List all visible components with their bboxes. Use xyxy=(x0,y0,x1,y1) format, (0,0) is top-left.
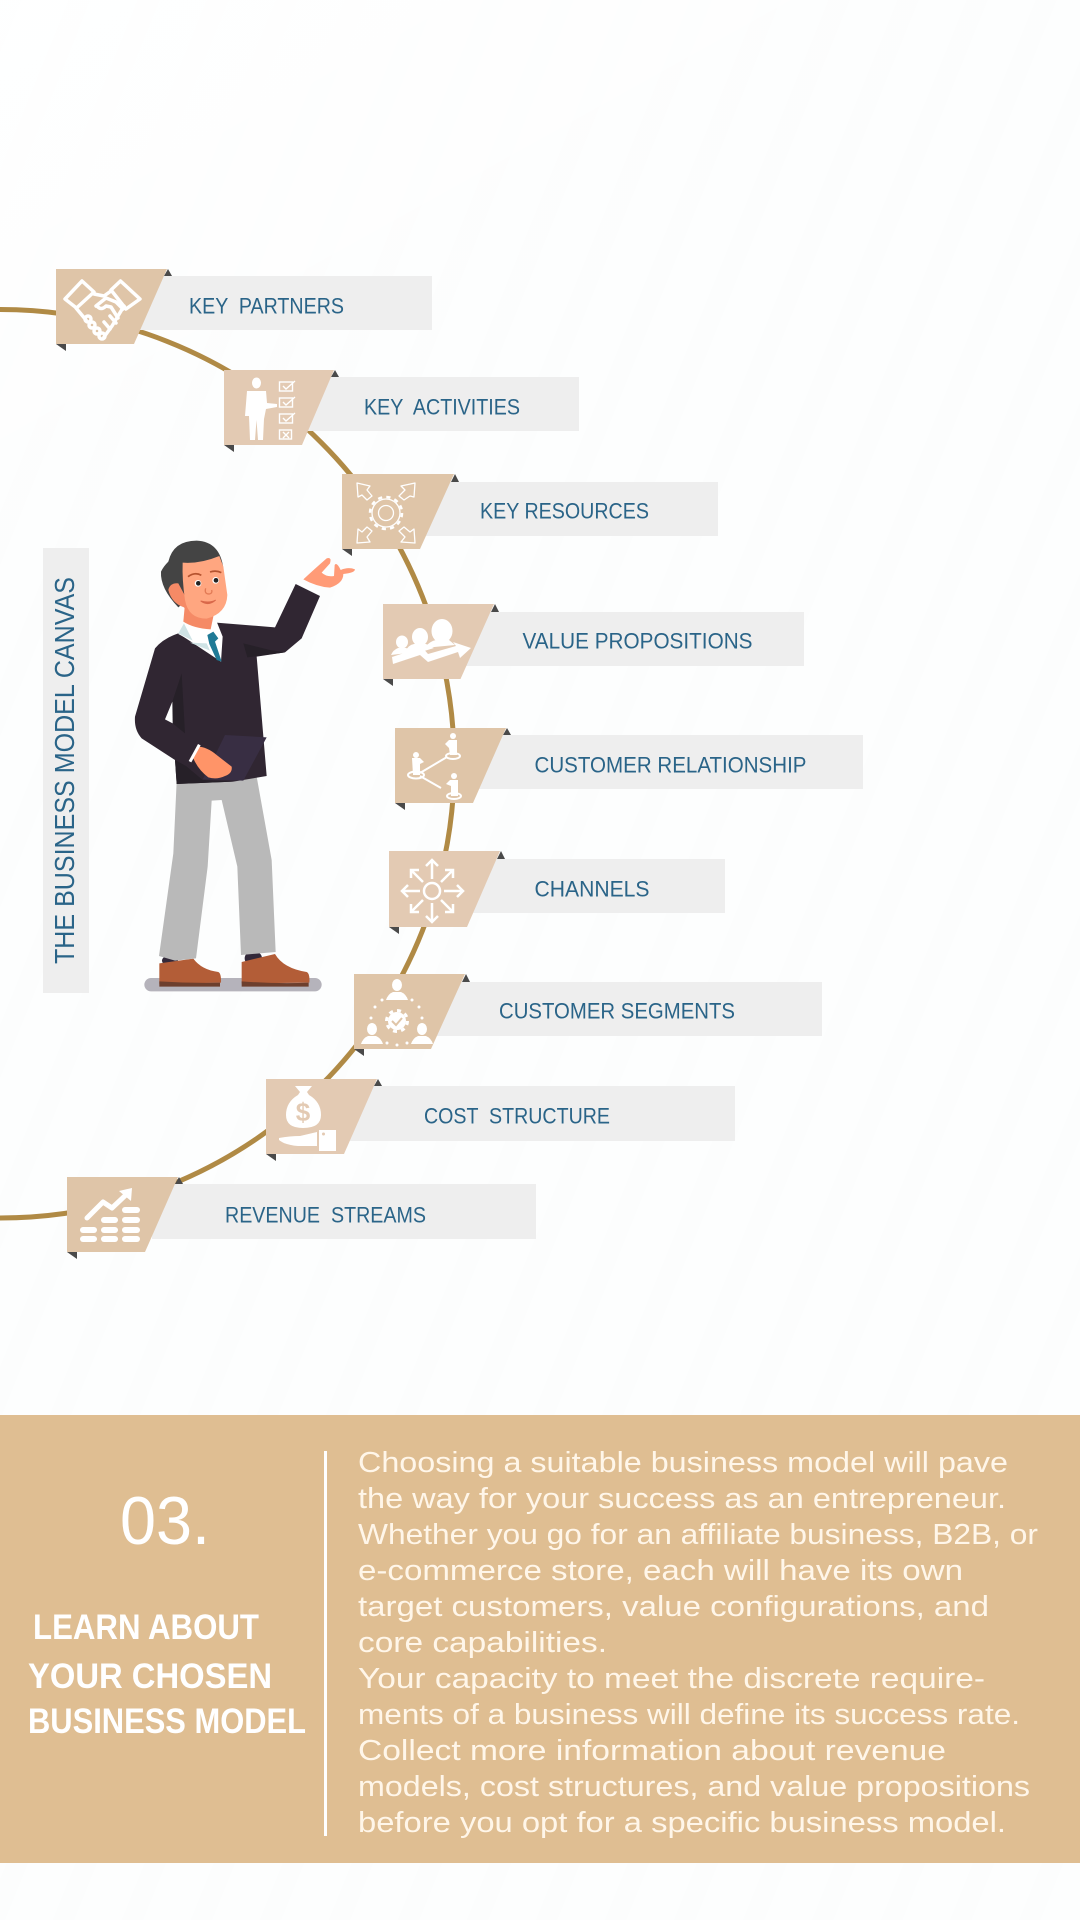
divider xyxy=(324,1451,327,1836)
label bar: channels xyxy=(470,859,725,913)
heading: BUSINESS MODEL xyxy=(28,1702,306,1741)
icon: gear with arrows xyxy=(357,483,415,543)
socks xyxy=(162,951,262,966)
tile: revenue streams xyxy=(67,1177,183,1259)
tile: key activities xyxy=(224,370,339,452)
panel: key resources xyxy=(342,474,718,556)
label: key activities: KEY ACTIVITIES xyxy=(364,394,520,420)
label: customer segments: CUSTOMER SEGMENTS xyxy=(499,998,735,1024)
icon: team around gear xyxy=(361,979,433,1046)
body text: Your capacity to meet the discrete require- xyxy=(358,1663,985,1695)
body text xyxy=(358,1447,1038,1839)
tile: channels xyxy=(389,851,505,934)
hair back xyxy=(161,541,223,607)
label bar: key resources xyxy=(425,482,718,536)
body text: the way for your success as an entrepreneur. xyxy=(358,1483,1006,1515)
body text: e-commerce store, each will have its own xyxy=(358,1555,963,1587)
panel: value propositions xyxy=(383,604,804,686)
label bar: key partners xyxy=(140,276,432,330)
panel: cost structure xyxy=(266,1079,735,1161)
body text: ments of a business will define its success rate. xyxy=(358,1699,1020,1731)
neck xyxy=(183,603,214,629)
body text: Whether you go for an affiliate business, B2B, or xyxy=(358,1519,1038,1551)
icon: people with arrow xyxy=(391,619,471,664)
body text: before you opt for a specific business model. xyxy=(358,1807,1006,1839)
label bar: value propositions xyxy=(465,612,804,666)
icon: growth chart and coins xyxy=(80,1188,140,1242)
label bar: cost structure xyxy=(350,1086,735,1141)
body text: core capabilities. xyxy=(358,1627,607,1659)
body text: Choosing a suitable business model will pave xyxy=(358,1447,1008,1479)
shadow xyxy=(144,978,322,991)
heading: YOUR CHOSEN xyxy=(28,1657,272,1696)
panel: channels xyxy=(389,851,725,934)
curved timeline arc xyxy=(0,310,454,1218)
step number: 03. xyxy=(120,1483,210,1559)
shoes xyxy=(159,954,309,987)
raised cuff xyxy=(297,582,319,593)
body text: target customers, value configurations, and xyxy=(358,1591,989,1623)
icon: connected people xyxy=(408,733,461,799)
panel: customer segments xyxy=(354,974,822,1056)
panel: customer relationship xyxy=(395,728,863,810)
label: channels: CHANNELS xyxy=(534,876,650,902)
title sidebar xyxy=(43,548,89,993)
icon: money bag and hand: $ xyxy=(296,1097,311,1127)
collar xyxy=(178,622,223,662)
illustration: businessman presenting xyxy=(135,541,355,991)
icon: money bag and hand xyxy=(279,1086,336,1151)
lower hand xyxy=(193,747,232,778)
label: revenue streams: REVENUE STREAMS xyxy=(225,1202,426,1228)
tablet xyxy=(203,735,267,781)
label: cost structure: COST STRUCTURE xyxy=(424,1104,610,1128)
tile: value propositions xyxy=(383,604,499,686)
tile: key resources xyxy=(342,474,459,556)
label bar: customer relationship xyxy=(475,735,863,789)
body text: Collect more information about revenue xyxy=(358,1735,946,1767)
raised hand xyxy=(303,558,355,588)
tile: key partners xyxy=(56,269,172,351)
facial features xyxy=(188,571,221,604)
heading xyxy=(28,1608,306,1741)
panel: revenue streams xyxy=(67,1177,536,1259)
sweater xyxy=(135,584,320,784)
trousers xyxy=(159,777,276,961)
tile: cost structure xyxy=(266,1079,382,1161)
ear and jaw shade xyxy=(168,583,190,617)
face xyxy=(183,556,227,619)
body text: models, cost structures, and value propositions xyxy=(358,1771,1030,1803)
tile: customer segments xyxy=(354,974,470,1056)
panel: key partners xyxy=(56,269,432,351)
icon: handshake xyxy=(65,281,140,339)
tie xyxy=(207,632,222,662)
lower cuff xyxy=(190,745,199,762)
title: THE BUSINESS MODEL CANVAS xyxy=(49,577,80,964)
arm gap xyxy=(165,702,173,723)
tile: customer relationship xyxy=(395,728,511,810)
label bar: key activities xyxy=(305,377,579,431)
label: key partners: KEY PARTNERS xyxy=(189,294,344,318)
panel: step 03 explanation xyxy=(0,1415,1080,1863)
label: value propositions: VALUE PROPOSITIONS xyxy=(522,628,752,654)
panel: key activities xyxy=(224,370,579,452)
label: customer relationship: CUSTOMER RELATIONSHIP xyxy=(534,752,806,778)
icon: person with checklist xyxy=(245,378,295,440)
label bar: revenue streams xyxy=(152,1184,536,1239)
sweater shading xyxy=(172,643,285,784)
label bar: customer segments xyxy=(435,982,822,1036)
heading: LEARN ABOUT xyxy=(33,1608,259,1647)
icon: arrows radiating from a circle xyxy=(402,860,463,922)
label: key resources: KEY RESOURCES xyxy=(480,498,649,524)
